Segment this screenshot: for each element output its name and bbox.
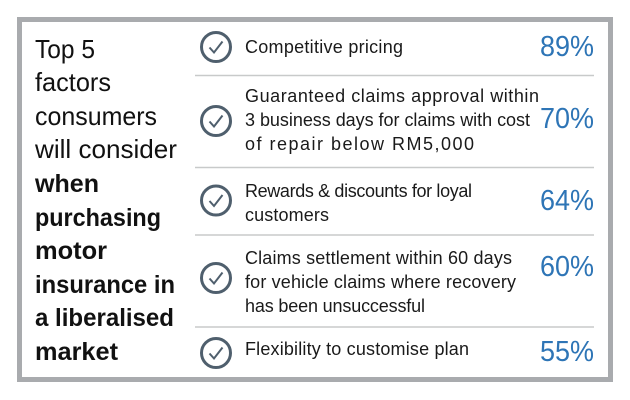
- heading: market: [35, 338, 119, 366]
- factor 4: claims settlement: [202, 248, 594, 316]
- factor text 1: Competitive pricing: [245, 37, 403, 57]
- factor text 2: of repair below RM5,000: [245, 134, 474, 154]
- factor text 4: Claims settlement within 60 days: [245, 248, 512, 268]
- factor text 5: Flexibility to customise plan: [245, 339, 469, 359]
- heading: purchasing: [35, 204, 161, 232]
- heading: Top 5: [35, 34, 95, 64]
- percentage 89%: 89%: [540, 31, 594, 63]
- icon: check circle 1: [202, 32, 230, 62]
- heading: when: [34, 170, 99, 198]
- heading: insurance in: [35, 271, 175, 299]
- heading: will consider: [34, 134, 177, 164]
- factor text 4: has been unsuccessful: [245, 296, 425, 316]
- factor text 2: Guaranteed claims approval within: [245, 86, 539, 106]
- percentage 70%: 70%: [540, 103, 594, 135]
- factor 3: rewards and discounts: [202, 181, 594, 225]
- factor text 3: [245, 181, 472, 225]
- heading: [34, 34, 177, 366]
- factor text 2: [245, 86, 539, 154]
- heading: factors: [35, 67, 111, 97]
- factor text 3: Rewards & discounts for loyal: [245, 181, 472, 201]
- factor 5: flexibility: [202, 336, 594, 368]
- icon: check circle 4: [202, 264, 230, 292]
- factor 1: competitive pricing: [202, 31, 594, 63]
- factor text 2: 3 business days for claims with cost: [245, 110, 530, 130]
- icon: check circle 5: [202, 338, 230, 368]
- heading: consumers: [35, 101, 157, 131]
- factor 2: guaranteed claims approval: [202, 86, 594, 154]
- icon: check circle 2: [202, 106, 230, 136]
- heading: motor: [35, 237, 107, 265]
- percentage 60%: 60%: [540, 251, 594, 283]
- heading: a liberalised: [35, 304, 174, 332]
- factor text 4: for vehicle claims where recovery: [245, 272, 516, 292]
- factor text 3: customers: [245, 205, 329, 225]
- percentage 55%: 55%: [540, 336, 594, 368]
- icon: check circle 3: [202, 186, 230, 215]
- factor text 4: [245, 248, 516, 316]
- percentage 64%: 64%: [540, 185, 594, 217]
